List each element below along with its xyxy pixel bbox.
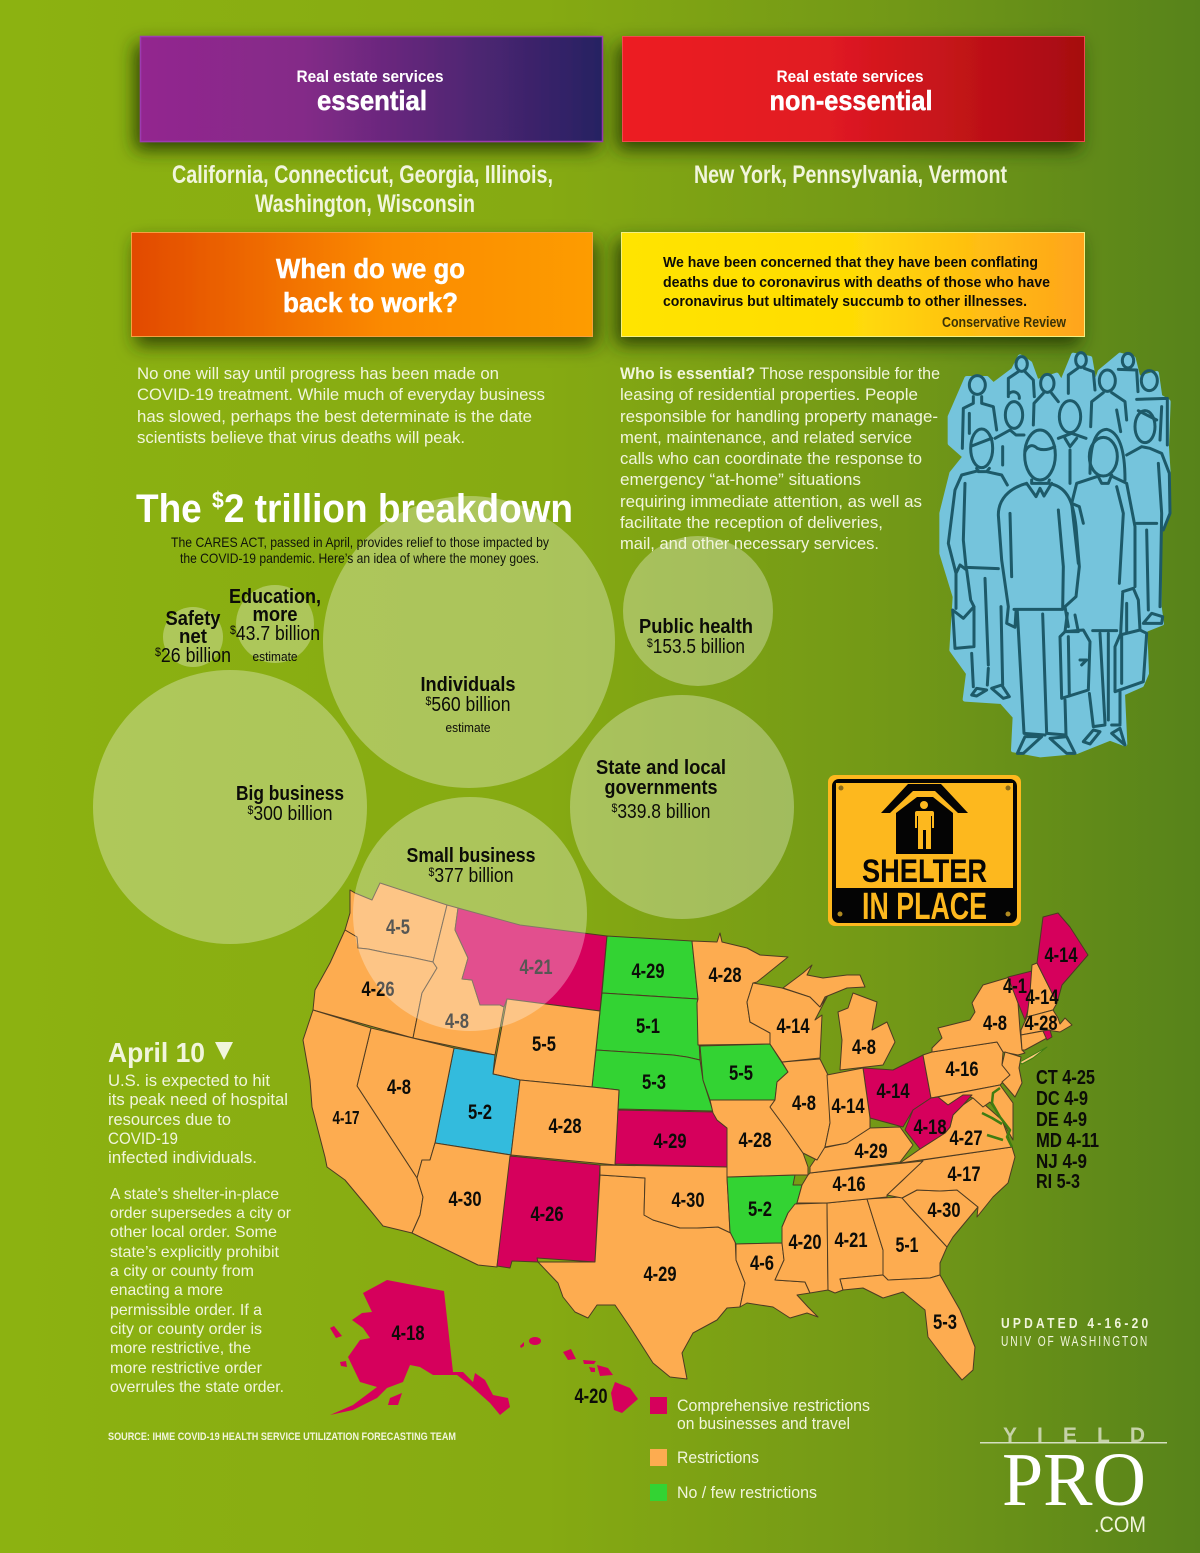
panel: quote from Conservative Review bbox=[622, 232, 1084, 336]
state: Washington bbox=[345, 883, 447, 962]
bubble label: safety net bbox=[155, 608, 231, 667]
panel: quote from Conservative Review: coronavirus but ultimately succumb to other illnesses. bbox=[663, 293, 1027, 310]
essential states list: California, Connecticut, Georgia, Illinois, bbox=[172, 161, 553, 189]
state opening dates on the map bbox=[332, 916, 1078, 1408]
state: Georgia bbox=[867, 1197, 947, 1280]
bubble label: public health: Public health bbox=[639, 616, 753, 638]
figure: back row bbox=[962, 353, 1167, 483]
state opening dates on the map: 4-8 bbox=[792, 1092, 816, 1115]
bubble: public health bbox=[623, 536, 773, 686]
subheading: CARES Act: The CARES ACT, passed in April, provides relief to those impacted by bbox=[171, 534, 549, 550]
panel: real estate services non-essential: Real estate services bbox=[776, 67, 924, 86]
state opening dates on the map: 4-29 bbox=[854, 1140, 888, 1163]
state: West Virginia bbox=[905, 1095, 972, 1149]
text block: April 10: COVID-19 bbox=[108, 1129, 178, 1148]
essential states list: Washington, Wisconsin bbox=[255, 190, 475, 218]
state opening dates on the map: 5-2 bbox=[468, 1101, 492, 1124]
state opening dates on the map: 4-16 bbox=[832, 1173, 866, 1196]
bubble label: big business: $ bbox=[248, 803, 254, 817]
bubble: safety net bbox=[163, 607, 223, 667]
icon: down triangle bbox=[215, 1042, 233, 1060]
icon: shelter in place sign: SHELTER bbox=[862, 853, 987, 889]
small state dates list: MD 4-11 bbox=[1036, 1130, 1099, 1152]
state: Minnesota bbox=[692, 933, 788, 1045]
panel: quote from Conservative Review: We have been concerned that they have been conflating bbox=[663, 254, 1038, 271]
state opening dates on the map: 4-8 bbox=[983, 1012, 1007, 1035]
state: Indiana bbox=[825, 1068, 870, 1147]
essential states list bbox=[172, 161, 553, 218]
state: Connecticut bbox=[1021, 1031, 1047, 1050]
bubble label: education: estimate bbox=[252, 649, 298, 664]
logo: Yield Pro bbox=[980, 1424, 1167, 1537]
panel: quote from Conservative Review: deaths due to coronavirus with deaths of those who have bbox=[663, 274, 1050, 291]
text block: who is essential: emergency “at-home” situations bbox=[620, 470, 861, 489]
state opening dates on the map: 4-28 bbox=[548, 1115, 582, 1138]
bubble label: individuals: 560 billion bbox=[431, 694, 510, 716]
icon: shelter in place sign bbox=[828, 775, 1021, 928]
text block: who is essential: responsible for handling property manage- bbox=[620, 407, 938, 426]
state opening dates on the map: 4-20 bbox=[574, 1385, 608, 1408]
bubble label: individuals bbox=[420, 674, 516, 735]
bubble: big business bbox=[93, 670, 367, 944]
text block: April 10: April 10 bbox=[108, 1037, 205, 1068]
illustration: group of workers bbox=[942, 353, 1170, 755]
update note: UNIV OF WASHINGTON bbox=[1001, 1332, 1147, 1350]
bubble label: state and local governments: $ bbox=[612, 801, 618, 815]
figure: left person bbox=[948, 429, 1009, 698]
panel: real estate services essential: Real estate services bbox=[296, 67, 444, 86]
map of the United States bbox=[303, 883, 1088, 1415]
state opening dates on the map: 4-20 bbox=[788, 1231, 822, 1254]
small state dates list: NJ 4-9 bbox=[1036, 1151, 1087, 1173]
text block: shelter-in-place order: permissible order. If a bbox=[110, 1302, 262, 1319]
bubble label: big business: Big business bbox=[236, 783, 344, 805]
state opening dates on the map: 4-26 bbox=[362, 978, 394, 1001]
legend item: no or few restrictions: No / few restrictions bbox=[677, 1483, 817, 1502]
state opening dates on the map: 4-14 bbox=[776, 1015, 810, 1038]
bubble label: education: more bbox=[252, 604, 298, 626]
panel: real estate services essential: essential bbox=[317, 85, 427, 116]
state: Louisiana bbox=[736, 1243, 818, 1318]
state opening dates on the map: 4-6 bbox=[750, 1252, 774, 1275]
text block: back to work bbox=[137, 364, 545, 447]
state: Arkansas bbox=[727, 1175, 802, 1244]
text block: April 10: its peak need of hospital bbox=[108, 1090, 288, 1109]
bubble: education bbox=[236, 585, 314, 663]
state: Maine bbox=[1037, 913, 1088, 1003]
bubble label: state and local governments: State and local bbox=[596, 757, 726, 779]
state opening dates on the map: 4-1 bbox=[1003, 975, 1027, 998]
state: Mississippi bbox=[775, 1203, 828, 1293]
text block: back to work: scientists believe that virus deaths will peak. bbox=[137, 428, 465, 447]
small state dates list: DE 4-9 bbox=[1036, 1109, 1087, 1131]
text block: shelter-in-place order: state’s explicitly prohibit bbox=[110, 1244, 280, 1261]
text block: shelter-in-place order: a city or county from bbox=[110, 1263, 254, 1280]
panel: real estate services non-essential: non-essential bbox=[770, 85, 932, 116]
state opening dates on the map: 4-30 bbox=[928, 1199, 960, 1222]
text block: shelter-in-place order bbox=[110, 1186, 292, 1396]
state opening dates on the map: 4-17 bbox=[948, 1163, 980, 1186]
bubble label: education: Education, bbox=[229, 586, 321, 608]
state: New Mexico bbox=[497, 1156, 600, 1268]
text block: who is essential: Who is essential? Those responsible for the bbox=[620, 364, 940, 383]
state opening dates on the map: 4-30 bbox=[672, 1189, 704, 1212]
state: Wyoming bbox=[493, 999, 600, 1087]
text block: who is essential: calls who can coordinate the response to bbox=[620, 449, 922, 468]
text block: back to work: No one will say until progress has been made on bbox=[137, 364, 499, 383]
state opening dates on the map: 4-17 bbox=[332, 1108, 360, 1128]
state: Oklahoma bbox=[600, 1165, 735, 1235]
state: Montana bbox=[455, 908, 607, 1011]
legend item: comprehensive restrictions: on businesses and travel bbox=[677, 1414, 850, 1433]
state: North Dakota bbox=[602, 936, 698, 999]
state opening dates on the map: 4-21 bbox=[520, 956, 553, 979]
Chesapeake Bay bbox=[982, 1088, 1012, 1147]
text block: back to work: has slowed, perhaps the best determinate is the date bbox=[137, 407, 532, 426]
bubble label: safety net: Safety bbox=[166, 608, 221, 630]
state: Alabama bbox=[827, 1199, 883, 1293]
update note bbox=[1001, 1315, 1148, 1350]
bubble label: education: 43.7 billion bbox=[236, 623, 320, 645]
bubble label: big business bbox=[236, 783, 344, 825]
bubble label: big business: 300 billion bbox=[253, 803, 332, 825]
bubble label: public health bbox=[639, 616, 753, 658]
logo: Yield Pro: .COM bbox=[1094, 1512, 1146, 1537]
state: Tennessee bbox=[797, 1161, 923, 1203]
state: Iowa bbox=[700, 1044, 788, 1100]
text block: who is essential: requiring immediate attention, as well as bbox=[620, 492, 922, 511]
state opening dates on the map: 5-3 bbox=[642, 1071, 666, 1094]
icon: roof bbox=[881, 784, 968, 813]
legend bbox=[650, 1396, 870, 1502]
state opening dates on the map: 4-29 bbox=[644, 1263, 676, 1286]
text block: shelter-in-place order: enacting a more bbox=[110, 1282, 223, 1299]
bubble: state and local governments bbox=[570, 695, 794, 919]
update note: UPDATED 4-16-20 bbox=[1001, 1315, 1148, 1331]
state opening dates on the map: 4-28 bbox=[708, 964, 742, 987]
text block: who is essential: leasing of residential properties. People bbox=[620, 385, 918, 404]
state: Kentucky bbox=[810, 1127, 913, 1173]
logo: Yield Pro: PRO bbox=[1002, 1438, 1146, 1522]
subheading: CARES Act bbox=[171, 534, 549, 566]
bubble label: individuals: $ bbox=[426, 694, 432, 708]
text block: shelter-in-place order: city or county order is bbox=[110, 1321, 262, 1338]
state: Hawaii bbox=[520, 1337, 638, 1413]
state opening dates on the map: 4-14 bbox=[1026, 986, 1059, 1009]
bubble label: safety net: 26 billion bbox=[161, 645, 231, 667]
state: Alaska bbox=[330, 1280, 510, 1415]
state opening dates on the map: 5-1 bbox=[636, 1015, 660, 1038]
state: Wisconsin bbox=[747, 983, 828, 1062]
text block: who is essential: ment, maintenance, and related service bbox=[620, 428, 912, 447]
text block: back to work: COVID-19 treatment. While much of everyday business bbox=[137, 385, 545, 404]
state: Missouri bbox=[710, 1100, 808, 1177]
text block: shelter-in-place order: overrules the state order. bbox=[110, 1379, 284, 1396]
bubble: small business bbox=[353, 797, 587, 1031]
bubble: individuals bbox=[323, 496, 615, 788]
state: Utah bbox=[435, 1048, 520, 1155]
text block: shelter-in-place order: more restrictive order bbox=[110, 1360, 263, 1377]
logo: Yield Pro: YIELD bbox=[1003, 1424, 1145, 1447]
state opening dates on the map: 4-5 bbox=[386, 916, 410, 939]
figure: right back person bbox=[1127, 411, 1170, 623]
figure: front man with briefcase bbox=[998, 430, 1090, 753]
bubble label: state and local governments: governments bbox=[604, 777, 718, 799]
panel: when do we go back to work: back to work? bbox=[283, 287, 458, 318]
bubble label: state and local governments bbox=[596, 757, 726, 823]
state: North Carolina bbox=[887, 1147, 1015, 1217]
panel: when do we go back to work: When do we go bbox=[276, 253, 465, 284]
bubble label: public health: 153.5 billion bbox=[653, 636, 745, 658]
state opening dates on the map: 4-18 bbox=[392, 1322, 425, 1345]
bubble label: small business: 377 billion bbox=[434, 865, 514, 887]
bubble label: safety net: net bbox=[179, 626, 207, 648]
state opening dates on the map: 4-28 bbox=[1024, 1012, 1058, 1035]
text block: who is essential: facilitate the reception of deliveries, bbox=[620, 513, 883, 532]
bubble label: state and local governments: 339.8 billion bbox=[617, 801, 710, 823]
state opening dates on the map: 4-30 bbox=[448, 1188, 482, 1211]
figure: woman with bag bbox=[1072, 429, 1147, 745]
panel: quote from Conservative Review: Conservative Review bbox=[942, 314, 1066, 331]
state: Idaho bbox=[413, 905, 504, 1055]
bubble label: education: $ bbox=[230, 623, 236, 637]
text block: shelter-in-place order: order supersedes a city or bbox=[110, 1205, 292, 1222]
state opening dates on the map: 5-5 bbox=[729, 1062, 753, 1085]
state: Nebraska bbox=[592, 1050, 713, 1111]
icon: person bbox=[915, 801, 934, 849]
state: Nevada bbox=[357, 1028, 454, 1178]
state opening dates on the map: 4-27 bbox=[950, 1127, 982, 1150]
state opening dates on the map: 4-18 bbox=[914, 1116, 947, 1139]
state: Florida bbox=[840, 1275, 975, 1380]
state opening dates on the map: 5-2 bbox=[748, 1198, 772, 1221]
panel: real estate services non-essential bbox=[622, 36, 1084, 142]
legend item: restrictions: Restrictions bbox=[677, 1448, 759, 1467]
icon: house bbox=[896, 797, 953, 854]
state opening dates on the map: 4-21 bbox=[834, 1229, 868, 1252]
state: Kansas bbox=[615, 1110, 727, 1167]
bubble label: individuals: Individuals bbox=[420, 674, 516, 696]
heading: two trillion breakdown: 2 trillion breakdown bbox=[224, 487, 573, 531]
text block: who is essential: mail, and other necessary services. bbox=[620, 534, 879, 553]
state: California bbox=[303, 1010, 423, 1233]
text block: April 10: U.S. is expected to hit bbox=[108, 1071, 270, 1090]
state: Virginia bbox=[900, 1098, 1012, 1163]
state opening dates on the map: 4-8 bbox=[387, 1076, 411, 1099]
bubble label: public health: $ bbox=[647, 636, 653, 650]
state: South Carolina bbox=[902, 1190, 978, 1247]
panel: when do we go back to work bbox=[132, 232, 592, 336]
panel: real estate services essential bbox=[140, 36, 602, 142]
non-essential states list: New York, Pennsylvania, Vermont bbox=[694, 161, 1008, 189]
state opening dates on the map: 4-8 bbox=[852, 1036, 876, 1059]
text block: April 10: resources due to bbox=[108, 1110, 231, 1129]
bubble label: small business bbox=[406, 845, 536, 887]
bubble label: safety net: $ bbox=[155, 645, 161, 659]
state opening dates on the map: 4-8 bbox=[445, 1010, 469, 1033]
state: Michigan upper peninsula bbox=[783, 965, 865, 1007]
heading: two trillion breakdown: The bbox=[136, 487, 207, 531]
legend item: comprehensive restrictions: Comprehensive restrictions bbox=[677, 1396, 870, 1415]
source note: SOURCE: IHME COVID-19 HEALTH SERVICE UTILIZATION FORECASTING TEAM bbox=[108, 1431, 456, 1443]
state: Long Island bbox=[1020, 1047, 1047, 1064]
state opening dates on the map: 4-16 bbox=[946, 1058, 978, 1081]
text block: who is essential bbox=[620, 364, 940, 553]
text block: April 10: infected individuals. bbox=[108, 1148, 257, 1167]
text block: shelter-in-place order: more restrictive, the bbox=[110, 1340, 251, 1357]
legend item: comprehensive restrictions bbox=[650, 1396, 870, 1433]
state: Oregon bbox=[313, 930, 437, 1038]
text block: shelter-in-place order: other local order. Some bbox=[110, 1224, 277, 1241]
state: Michigan lower peninsula bbox=[838, 993, 895, 1070]
state: Illinois bbox=[770, 1059, 830, 1160]
state opening dates on the map: 4-29 bbox=[654, 1130, 686, 1153]
state: New York bbox=[932, 977, 1025, 1055]
bubble chart: two trillion breakdown bbox=[93, 496, 794, 1031]
state opening dates on the map: 4-28 bbox=[738, 1129, 772, 1152]
bubble label: individuals: estimate bbox=[446, 720, 490, 735]
bubble label: small business: Small business bbox=[406, 845, 536, 867]
state: Ohio bbox=[863, 1055, 931, 1127]
bubble label: education bbox=[229, 586, 321, 664]
state opening dates on the map: 5-1 bbox=[896, 1234, 919, 1257]
state opening dates on the map: 4-29 bbox=[632, 960, 664, 983]
text block: shelter-in-place order: A state's shelter-in-place bbox=[110, 1186, 279, 1203]
small state dates list bbox=[1036, 1067, 1099, 1193]
state opening dates on the map: 4-26 bbox=[530, 1203, 564, 1226]
bubble label: small business: $ bbox=[428, 865, 435, 879]
state: Rhode Island bbox=[1043, 1030, 1052, 1040]
state opening dates on the map: 4-14 bbox=[1044, 944, 1078, 967]
state: New Jersey bbox=[1002, 1052, 1022, 1097]
state: Pennsylvania bbox=[923, 1042, 1010, 1098]
state: Vermont bbox=[1008, 971, 1032, 1020]
small state dates list: RI 5-3 bbox=[1036, 1171, 1080, 1193]
state: Maryland and Delaware bbox=[938, 1085, 1013, 1140]
state: Texas bbox=[538, 1175, 745, 1379]
state: Massachusetts bbox=[1021, 1010, 1072, 1035]
text block: April 10 bbox=[108, 1037, 288, 1167]
icon: shelter in place sign: IN PLACE bbox=[862, 886, 987, 928]
subheading: CARES Act: the COVID-19 pandemic. Here’s an idea of where the money goes. bbox=[180, 550, 539, 566]
state: New Hampshire bbox=[1027, 963, 1057, 1017]
state: Colorado bbox=[511, 1080, 619, 1165]
small state dates list: DC 4-9 bbox=[1036, 1088, 1088, 1110]
state: South Dakota bbox=[596, 993, 700, 1060]
state opening dates on the map: 4-14 bbox=[876, 1080, 910, 1103]
small state dates list: CT 4-25 bbox=[1036, 1067, 1095, 1089]
state: Arizona bbox=[412, 1143, 511, 1267]
state opening dates on the map: 5-3 bbox=[933, 1311, 957, 1334]
heading: two trillion breakdown: $ bbox=[212, 487, 224, 513]
state opening dates on the map: 4-14 bbox=[832, 1095, 865, 1118]
state opening dates on the map: 5-5 bbox=[532, 1033, 556, 1056]
